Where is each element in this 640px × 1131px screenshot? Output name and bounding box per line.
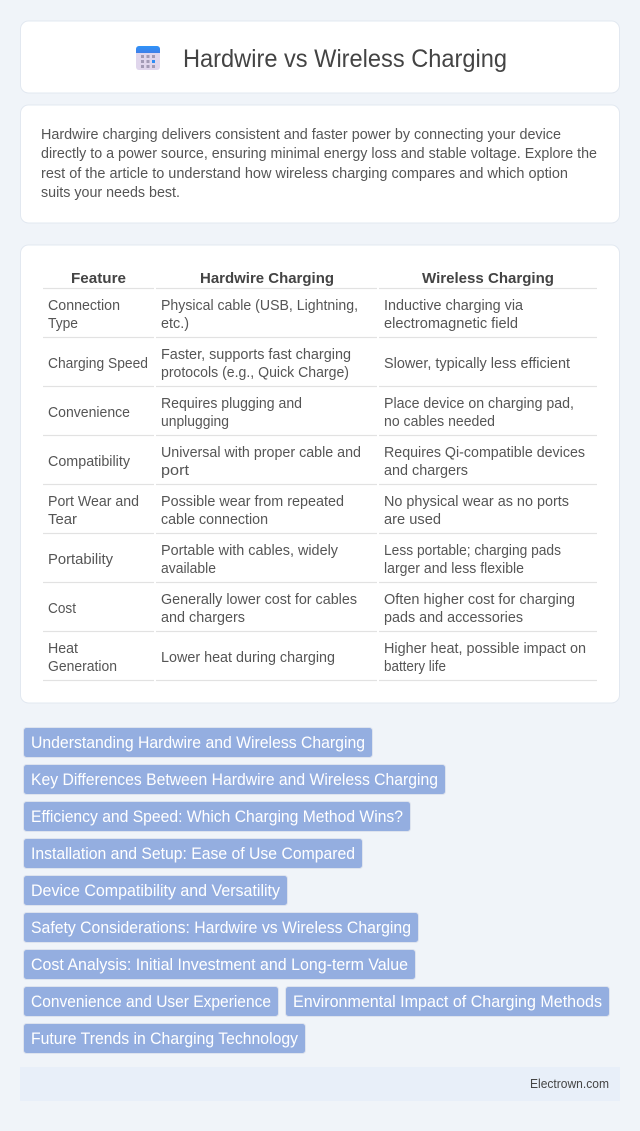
tag: understanding — [24, 728, 372, 758]
row: port wear and tear: Tear — [48, 512, 77, 528]
tag: efficiency and speed — [24, 802, 410, 832]
row: charging speed: Charging Speed — [48, 356, 148, 372]
row: connection type — [43, 298, 597, 338]
panel: intro text: directly to a power source, ensuring minimal energy loss and stable voltage. Explore the — [41, 146, 597, 162]
title: Hardwire vs Wireless Charging — [183, 45, 507, 73]
row: port wear and tear — [43, 494, 597, 534]
tag: cost analysis: Cost Analysis: Initial Investment and Long-term Value — [31, 956, 408, 974]
panel: intro text: suits your needs best. — [41, 185, 180, 201]
tag: installation — [24, 838, 362, 868]
panel: intro text: rest of the article to understand how wireless charging compares and which option — [41, 166, 568, 182]
panel: title header — [20, 21, 620, 93]
topic tags — [24, 728, 610, 1054]
tag: cost analysis — [24, 950, 416, 980]
row: port wear and tear: cable connection — [161, 512, 268, 528]
row: connection type: electromagnetic field — [384, 316, 518, 332]
table header row: Hardwire Charging — [200, 270, 334, 287]
row: charging speed: protocols (e.g., Quick Charge) — [161, 365, 349, 381]
table header row: Wireless Charging — [422, 270, 554, 287]
row: compatibility: port — [161, 463, 189, 479]
row: convenience: Place device on charging pad, — [384, 396, 574, 412]
tag: installation: Installation and Setup: Ease of Use Compared — [31, 845, 355, 863]
row: portability: Less portable; charging pads — [384, 543, 561, 559]
row: heat generation: Higher heat, possible impact on — [384, 641, 586, 657]
row: connection type: Type — [48, 316, 78, 332]
tag: environmental impact — [286, 986, 610, 1016]
row: convenience: Convenience — [48, 405, 130, 421]
row: port wear and tear: Port Wear and — [48, 494, 139, 510]
tag: safety: Safety Considerations: Hardwire vs Wireless Charging — [31, 919, 411, 937]
row: heat generation: Heat — [48, 641, 78, 657]
tag: future trends: Future Trends in Charging Technology — [31, 1030, 299, 1048]
footer: Electrown.com — [530, 1077, 609, 1091]
row: convenience — [43, 396, 597, 436]
tag: environmental impact: Environmental Impact of Charging Methods — [293, 993, 602, 1011]
tag: convenience: Convenience and User Experience — [31, 993, 271, 1011]
row: compatibility — [43, 445, 597, 484]
footer — [20, 1067, 620, 1101]
row: connection type: etc.) — [161, 316, 189, 332]
row: portability: Portable with cables, widely — [161, 543, 339, 559]
row: port wear and tear: Possible wear from repeated — [161, 494, 344, 510]
row: port wear and tear: are used — [384, 512, 441, 528]
tag: key differences — [24, 764, 446, 794]
tag: convenience — [24, 986, 278, 1016]
tag: safety — [24, 912, 418, 942]
row: convenience: unplugging — [161, 414, 229, 430]
row: heat generation: Lower heat during charging — [161, 650, 335, 666]
tag: efficiency and speed: Efficiency and Speed: Which Charging Method Wins? — [31, 808, 403, 826]
row: portability — [43, 543, 597, 582]
row: port wear and tear: No physical wear as no ports — [384, 494, 569, 510]
tag: future trends — [24, 1024, 306, 1054]
row: compatibility: Universal with proper cable and — [161, 445, 361, 461]
row: cost: Cost — [48, 601, 76, 617]
panel: intro text: Hardwire charging delivers consistent and faster power by connecting your device — [41, 127, 561, 143]
row: connection type: Physical cable (USB, Lightning, — [161, 298, 358, 314]
row: charging speed — [43, 347, 597, 386]
row: portability: available — [161, 561, 216, 577]
table header row — [43, 270, 597, 288]
panel: intro text — [20, 105, 620, 223]
row: cost: Generally lower cost for cables — [161, 592, 357, 608]
icon: calendar — [136, 46, 160, 70]
row: compatibility: Requires Qi-compatible devices — [384, 445, 585, 461]
row: cost: Often higher cost for charging — [384, 592, 575, 608]
row: convenience: no cables needed — [384, 414, 495, 430]
row: portability: Portability — [48, 552, 114, 568]
tag: compatibility: Device Compatibility and Versatility — [31, 882, 281, 900]
tag: compatibility — [24, 876, 288, 906]
row: cost: pads and accessories — [384, 610, 523, 626]
row: charging speed: Faster, supports fast charging — [161, 347, 351, 363]
row: compatibility: Compatibility — [48, 454, 131, 470]
panel: comparison table — [20, 245, 620, 703]
row: heat generation: battery life — [384, 659, 446, 675]
row: heat generation: Generation — [48, 659, 117, 675]
row: heat generation — [43, 641, 597, 680]
table header row: Feature — [71, 270, 126, 287]
row: charging speed: Slower, typically less efficient — [384, 356, 570, 372]
tag: key differences: Key Differences Between Hardwire and Wireless Charging — [31, 771, 438, 789]
row: convenience: Requires plugging and — [161, 396, 302, 412]
row: connection type: Inductive charging via — [384, 298, 524, 314]
row: cost — [43, 592, 597, 632]
row: connection type: Connection — [48, 298, 120, 314]
row: cost: and chargers — [161, 610, 245, 626]
tag: understanding: Understanding Hardwire and Wireless Charging — [31, 734, 365, 752]
row: compatibility: and chargers — [384, 463, 468, 479]
row: portability: larger and less flexible — [384, 561, 524, 577]
